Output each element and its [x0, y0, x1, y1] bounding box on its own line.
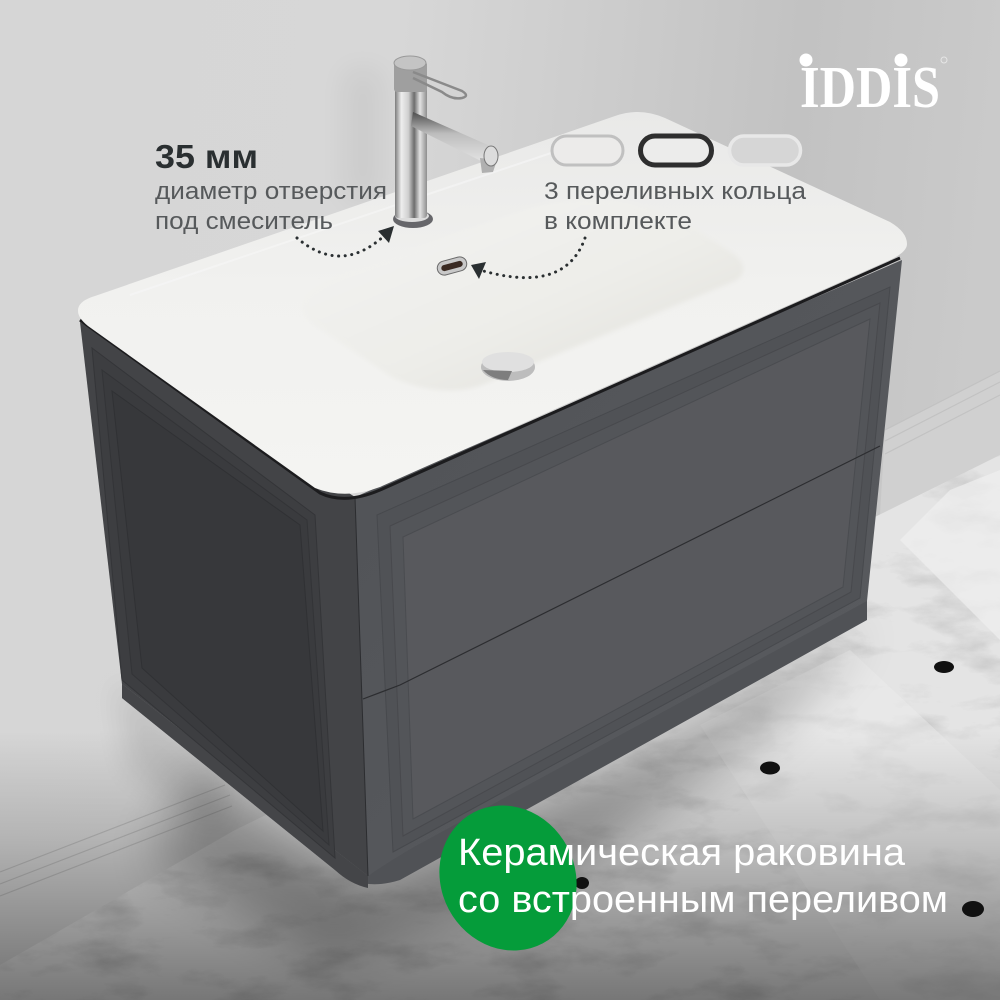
- caption: Керамическая раковина: [458, 832, 906, 874]
- sink bowl: [302, 199, 744, 390]
- wall baseboard: [0, 371, 1000, 965]
- caption: со встроенным переливом: [458, 879, 948, 921]
- drain: [481, 352, 535, 381]
- rings: three overflow rings: [552, 136, 800, 165]
- ceramic sink: [78, 112, 907, 498]
- chrome faucet: [393, 56, 498, 228]
- logo: IDDIS: IDDIS: [800, 54, 940, 120]
- text: faucet hole diameter: диаметр отверстия: [155, 178, 387, 205]
- side plinth shade: [122, 684, 368, 888]
- sink deck: [78, 112, 907, 494]
- faucet body: [395, 62, 427, 218]
- vanity cabinet: [80, 260, 902, 888]
- marble floor: [0, 440, 1000, 1000]
- drawer gap: [363, 446, 880, 699]
- cabinet plinth: [122, 600, 867, 884]
- faucet base: [393, 210, 433, 228]
- cabinet side panel: [80, 322, 368, 876]
- corner seam: [355, 497, 368, 876]
- heading: 35 mm: 35 мм: [155, 138, 258, 175]
- text: three rings included: в комплекте: [544, 208, 692, 235]
- side panel inset: [92, 348, 335, 858]
- arrow: to overflow slot: [471, 238, 585, 279]
- sink underside line: [80, 258, 900, 498]
- callout: overflow rings: [544, 136, 813, 235]
- text: three rings included: 3 переливных кольца: [544, 178, 807, 205]
- text: faucet hole diameter: под смеситель: [155, 208, 333, 235]
- front panel inset: [377, 287, 890, 852]
- faucet handle: [413, 72, 466, 98]
- arrow: to faucet hole: [297, 226, 394, 256]
- floor fixings: [575, 661, 984, 917]
- overflow slot: [436, 255, 468, 277]
- green blob: [414, 781, 602, 975]
- cabinet front: [355, 260, 902, 876]
- faucet collar: [394, 62, 427, 92]
- back lip groove: [130, 150, 560, 295]
- faucet spout: [411, 112, 497, 166]
- bottom dark gradient: [0, 730, 1000, 1000]
- callout: 35 mm: [155, 138, 394, 235]
- cabinet shadow on floor and wall: [115, 70, 870, 960]
